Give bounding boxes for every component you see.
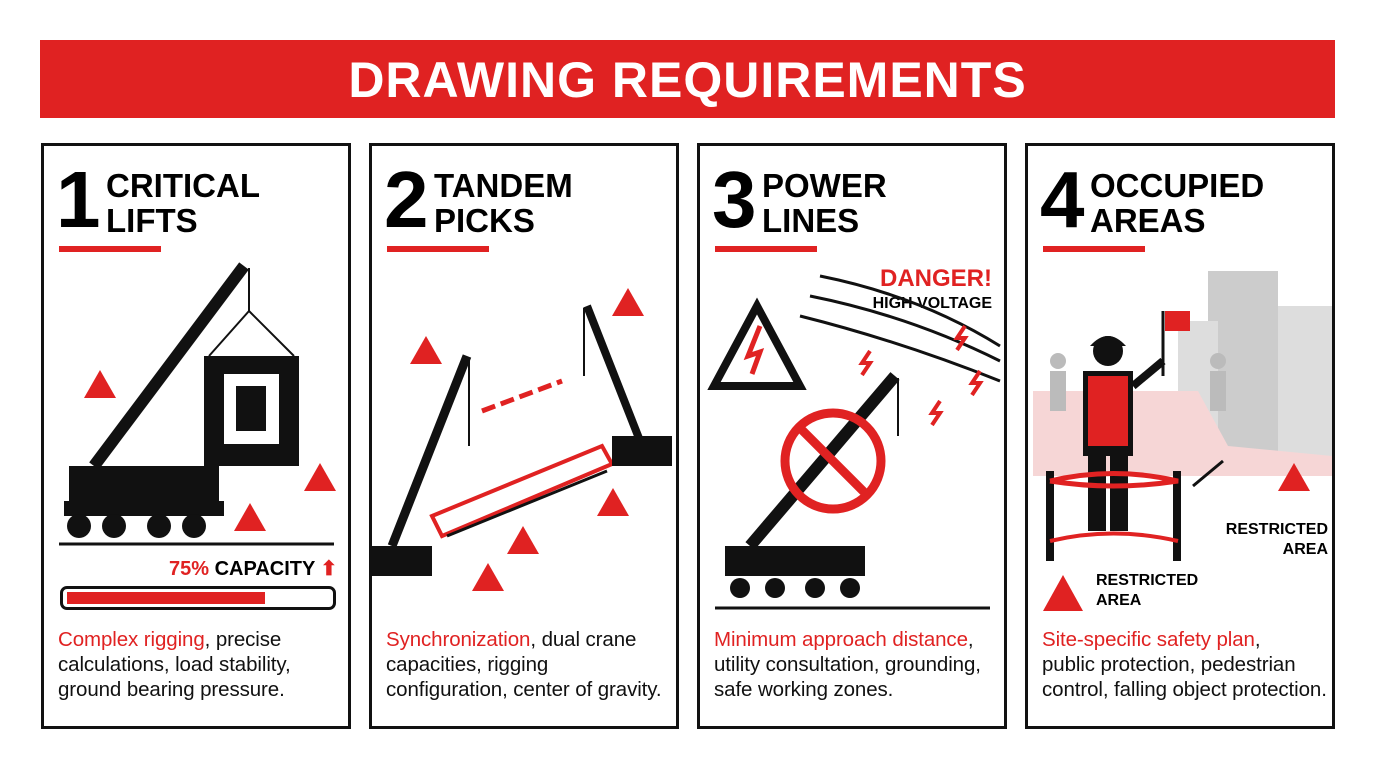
description: public protection, pedestrian <box>1042 653 1296 676</box>
description: configuration, center of gravity. <box>386 678 662 701</box>
heading: CRITICAL <box>106 167 260 204</box>
description: capacities, rigging <box>386 653 548 676</box>
danger label: HIGH VOLTAGE <box>873 295 992 312</box>
underline <box>59 246 161 252</box>
description: Synchronization, dual crane <box>386 628 636 651</box>
heading number: 4 <box>1040 155 1082 244</box>
description: Minimum approach distance, <box>714 628 973 651</box>
title: DRAWING REQUIREMENTS <box>348 52 1027 108</box>
heading number: 1 <box>56 155 98 244</box>
heading: POWER <box>762 167 887 204</box>
heading <box>106 167 260 239</box>
description: Site-specific safety plan, <box>1042 628 1260 651</box>
panel: tandem picks <box>369 143 679 729</box>
description: calculations, load stability, <box>58 653 291 676</box>
description: safe working zones. <box>714 678 893 701</box>
underline <box>387 246 489 252</box>
heading: OCCUPIED <box>1090 167 1264 204</box>
description: utility consultation, grounding, <box>714 653 981 676</box>
description: ground bearing pressure. <box>58 678 285 701</box>
heading: LIFTS <box>106 202 198 239</box>
title <box>40 40 1335 118</box>
heading number: 3 <box>712 155 754 244</box>
illustration: crane near power lines <box>707 274 1001 610</box>
description <box>1042 628 1327 701</box>
restricted area label 1: AREA <box>1283 541 1328 558</box>
panel: occupied areas <box>1025 143 1335 729</box>
danger label <box>873 265 992 312</box>
illustration: flagger with barrier <box>1033 271 1332 611</box>
heading <box>1090 167 1264 239</box>
description <box>386 628 662 701</box>
capacity label: 75% CAPACITY ⬆ <box>169 558 337 580</box>
heading: PICKS <box>434 202 535 239</box>
heading: AREAS <box>1090 202 1206 239</box>
heading <box>434 167 573 239</box>
capacity bar <box>60 586 336 610</box>
illustration: two cranes with beam <box>372 288 672 591</box>
panel: power lines <box>697 143 1007 729</box>
heading: TANDEM <box>434 167 573 204</box>
description: Complex rigging, precise <box>58 628 281 651</box>
underline <box>715 246 817 252</box>
restricted area label 2 <box>1096 572 1198 609</box>
heading: LINES <box>762 202 859 239</box>
description: control, falling object protection. <box>1042 678 1327 701</box>
restricted area label 2: AREA <box>1096 592 1141 609</box>
restricted area label 1 <box>1226 521 1328 558</box>
panel: critical lifts <box>41 143 351 729</box>
description <box>58 628 291 701</box>
heading <box>762 167 887 239</box>
description <box>714 628 981 701</box>
heading number: 2 <box>384 155 426 244</box>
restricted area label 1: RESTRICTED <box>1226 521 1328 538</box>
underline <box>1043 246 1145 252</box>
illustration: crane lifting generator <box>59 262 336 546</box>
danger label: DANGER! <box>880 265 992 292</box>
restricted area label 2: RESTRICTED <box>1096 572 1198 589</box>
